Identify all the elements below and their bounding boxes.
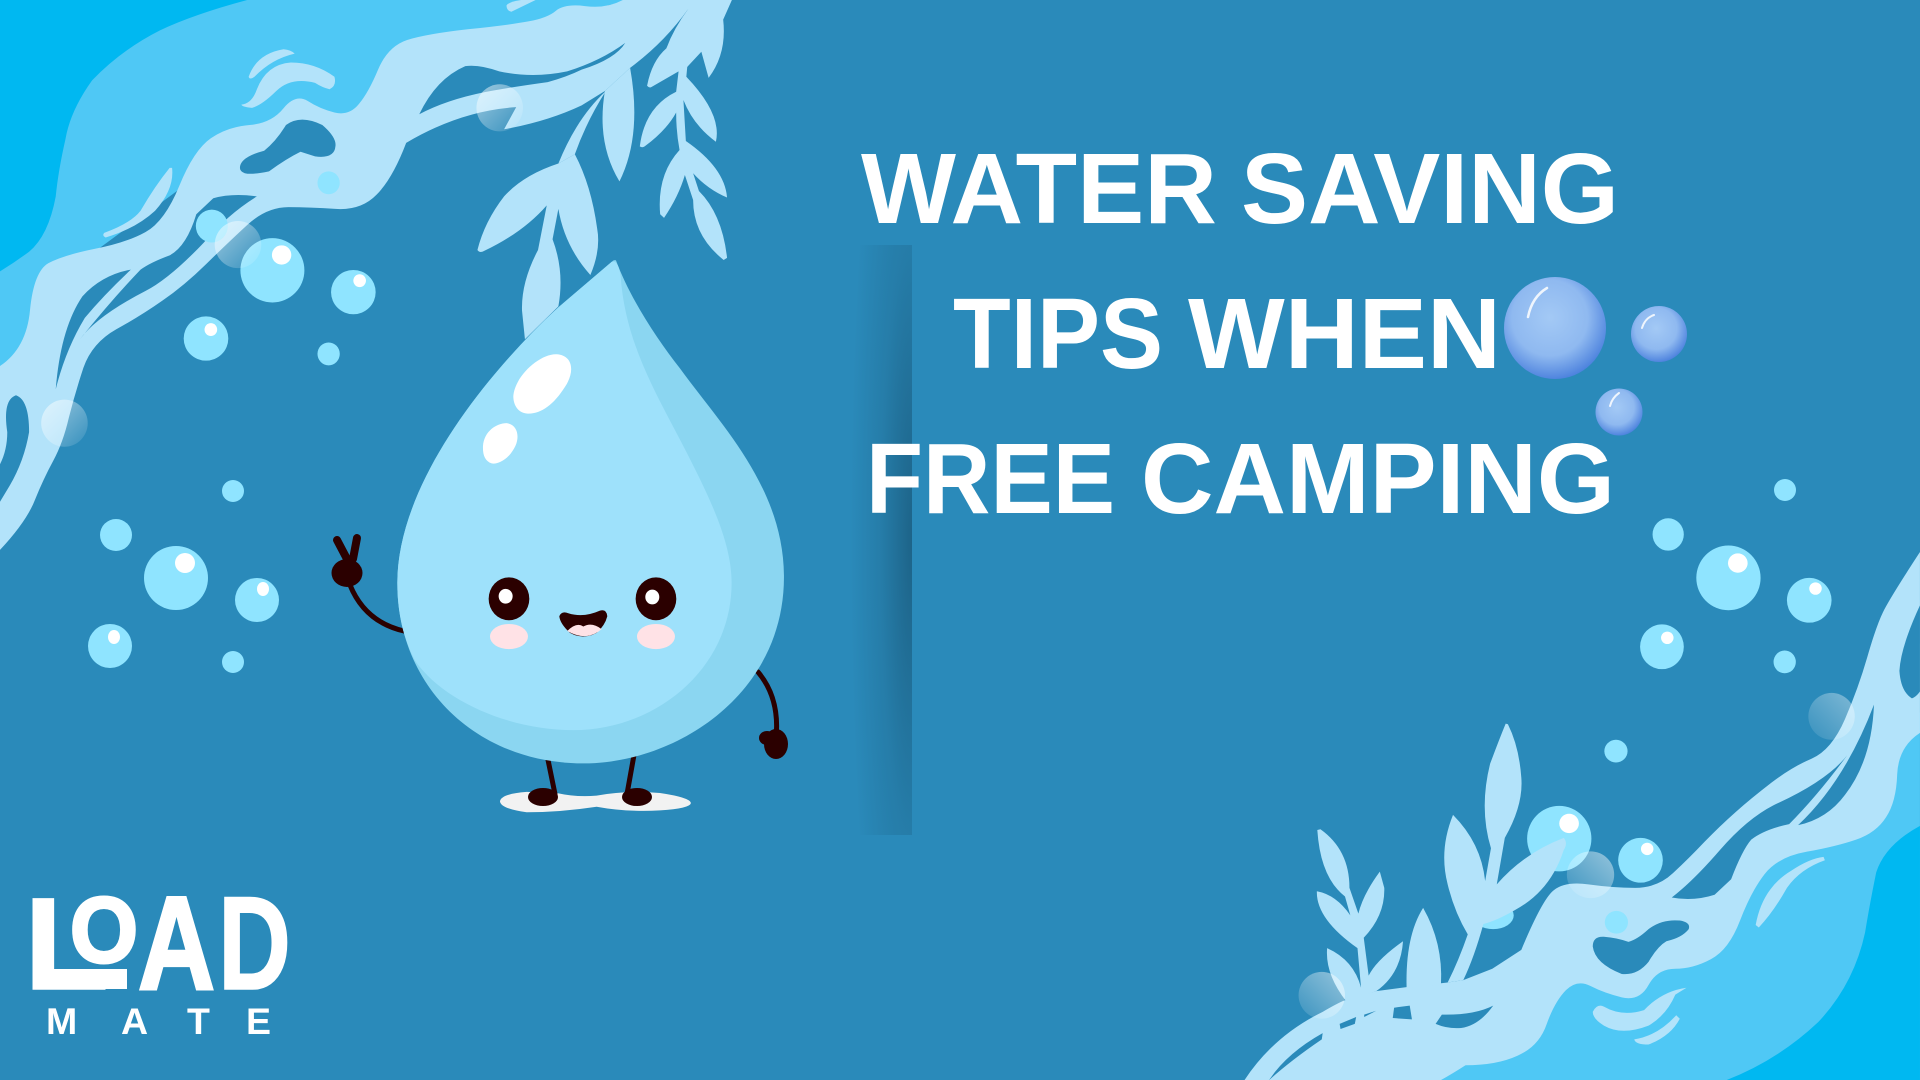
bubbles behind plants [1473,806,1663,929]
logo word LOAD [24,870,291,1018]
hanging leaves [477,9,727,339]
logo word LOAD: D [218,870,291,1018]
divider shadow stripe [850,245,912,835]
lighter face area [397,262,732,730]
title: FREE [866,423,1115,535]
title: TIPS [953,278,1163,390]
panel: bottom-right water wave [1245,518,1920,1080]
panel: left bubble cluster [88,480,279,673]
cheeks [490,624,675,649]
top right small bubble [1774,479,1796,501]
bubble highlights [205,245,366,336]
panel: top-left water wave [0,0,732,550]
title: WHEN [1188,278,1501,390]
light water band [1245,552,1920,1080]
bubbles [184,171,376,365]
mid blue wave [0,0,630,393]
band gaps [0,43,625,502]
glints [513,354,571,414]
drop body [397,260,784,763]
character: water drop mascot [332,260,788,812]
shadow puddle [500,792,691,812]
title: CAMPING [1141,423,1615,535]
upper right bubbles [1604,518,1832,934]
translucent bubbles [1299,693,1855,1019]
light water band [0,0,732,550]
hands and feet [332,559,788,806]
logo: Load Mate [24,870,291,1042]
title [861,133,1619,535]
water swirls [103,0,536,237]
title: SAVING [1241,133,1619,245]
title: WATER [861,133,1217,245]
logo word LOAD: A [138,870,215,1018]
deep blue corner [0,0,247,271]
rising plants [1317,724,1566,1001]
deep blue corner [1727,826,1920,1080]
mid blue wave [1399,712,1920,1080]
logo word MATE: MATE [46,1000,271,1042]
eyes [489,577,676,620]
decorative blue bubbles [1504,277,1687,436]
mouth [559,610,607,637]
logo word LOAD: L [24,870,109,1017]
band gaps [1269,605,1920,1080]
logo word LOAD: O [70,878,138,982]
water swirls [1593,857,1825,1045]
limbs [337,538,777,794]
translucent bubbles [41,84,523,447]
